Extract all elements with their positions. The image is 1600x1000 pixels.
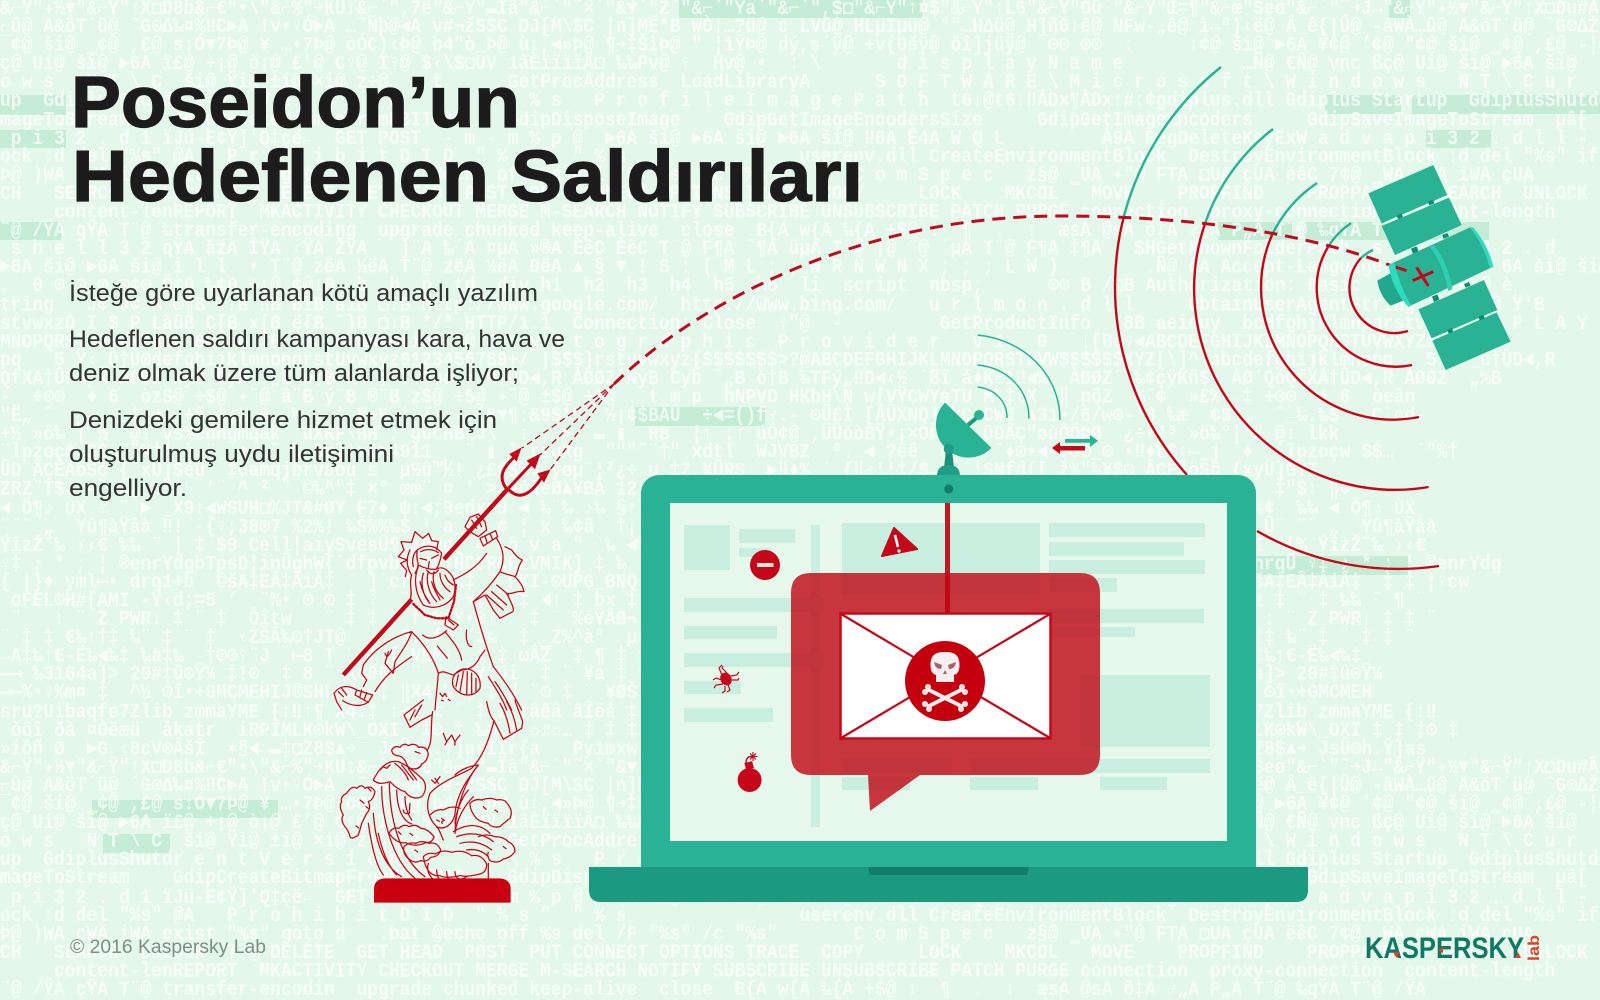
laptop screen (670, 503, 1227, 841)
warning triangle icon (882, 528, 917, 556)
description text: Hedeflenen saldırı kampanyası kara, hava ve (69, 326, 565, 353)
upper body, head and arms (334, 514, 524, 710)
bubble (791, 573, 1100, 811)
copyright: © 2016 Kaspersky Lab (70, 937, 266, 958)
description text (69, 280, 565, 502)
laptop base (589, 867, 1308, 902)
Kaspersky Lab logo: KASPERSKY (1365, 932, 1524, 965)
description text: Denizdeki gemilere hizmet etmek için (69, 407, 497, 434)
title: Poseidon’un (71, 63, 520, 143)
satellite dish (937, 404, 990, 476)
signal arcs from satellite (1115, 67, 1439, 569)
satellite (1368, 165, 1511, 370)
data exchange arrows (1052, 435, 1098, 454)
spider icon (713, 665, 739, 693)
statue base (374, 878, 511, 903)
small dish signal waves (978, 335, 1060, 420)
bomb icon (738, 752, 762, 792)
laptop lid (641, 475, 1256, 890)
description text: deniz olmak üzere tüm alanlarda işliyor; (69, 360, 519, 387)
screen content blocks (684, 523, 1210, 827)
skull and crossbones emblem (905, 641, 985, 721)
title: Hedeflenen Saldırıları (72, 137, 863, 217)
Poseidon figure with trident (334, 447, 551, 903)
attack trajectory dashed curve (522, 216, 1407, 470)
Kaspersky Lab logo: lab (1526, 935, 1543, 961)
description text: oluşturulmuş uydu iletişimini (69, 441, 394, 468)
envelope (840, 614, 1050, 738)
no-entry icon (750, 550, 780, 580)
webcam (944, 484, 953, 494)
title (71, 63, 863, 217)
description text: engelliyor. (69, 475, 187, 502)
hook line (945, 503, 950, 613)
phishing email speech bubble (791, 503, 1100, 811)
tail, waves and foam (340, 700, 523, 903)
trident (343, 447, 551, 675)
laptop (589, 475, 1308, 902)
base notch (868, 867, 1029, 875)
description text: İsteğe göre uyarlanan kötü amaçlı yazılım (69, 280, 538, 307)
